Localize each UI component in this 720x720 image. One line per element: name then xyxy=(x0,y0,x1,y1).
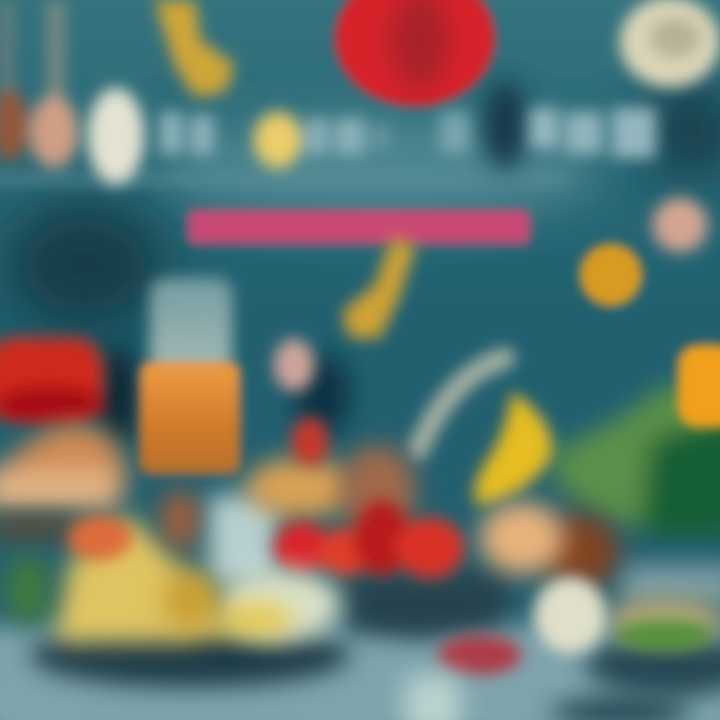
bread left xyxy=(0,425,128,510)
orange pepper right xyxy=(678,345,720,427)
table shadow left xyxy=(0,515,75,540)
dark bowl with tomatoes xyxy=(274,500,515,640)
yellow pepper top xyxy=(155,0,235,97)
yellow pepper centre xyxy=(342,238,416,338)
hanging kitchen utensils xyxy=(0,0,144,184)
red sauce cup xyxy=(405,635,690,720)
blurred title xyxy=(160,108,656,168)
banana xyxy=(475,392,552,505)
red bell pepper left xyxy=(0,338,138,445)
juice bottle xyxy=(140,278,240,474)
garlic top right xyxy=(620,0,720,87)
white glass xyxy=(208,495,278,585)
spoon handle xyxy=(418,358,505,450)
pink banner xyxy=(188,210,530,244)
pink radish centre xyxy=(274,339,350,435)
mushrooms xyxy=(480,502,618,653)
orange fruit xyxy=(580,244,642,306)
salad plate right xyxy=(585,565,720,697)
pasta plate xyxy=(6,490,350,687)
green leafy vegetables xyxy=(555,385,720,535)
red tomato top xyxy=(335,0,495,106)
pink radish right xyxy=(653,198,707,252)
centre dish with food xyxy=(245,418,416,535)
